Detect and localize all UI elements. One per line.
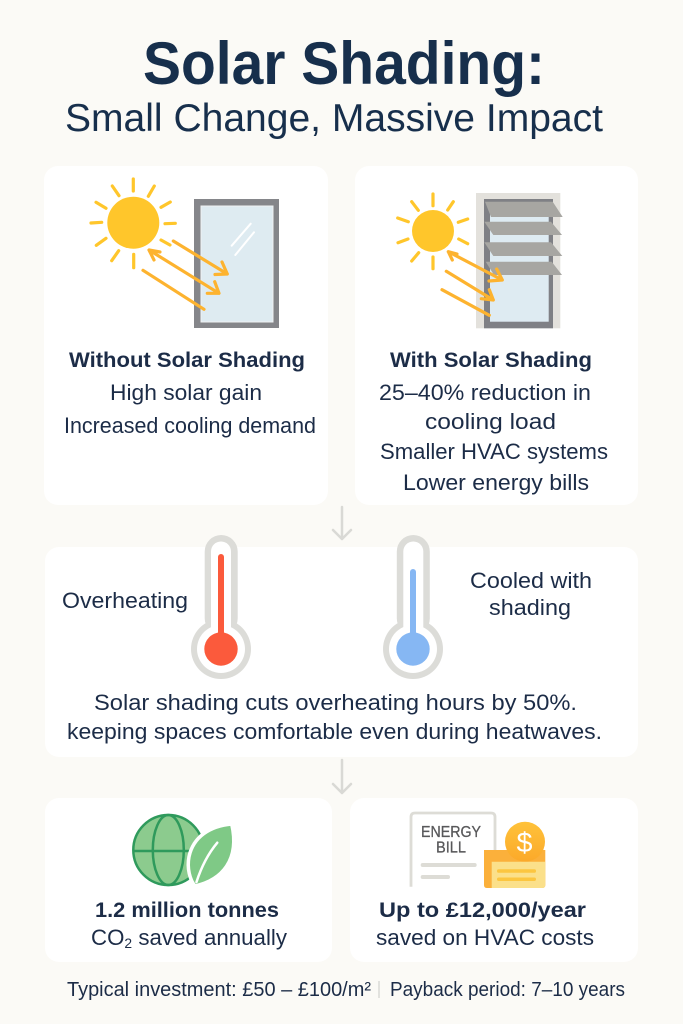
arrows: reduced sunlight (442, 252, 502, 315)
arrow: down to comfort panel (333, 507, 351, 539)
panel: hvac savings (350, 798, 638, 962)
icon: globe and leaf (133, 815, 234, 886)
arrows: sunlight entering window (143, 241, 227, 309)
text: smaller hvac: Smaller HVAC systems (380, 439, 608, 464)
icon: hot thermometer (191, 535, 251, 679)
text: cooling load: cooling load (425, 409, 556, 434)
footer: investment and payback: Payback period: 7–10 years (390, 979, 625, 1001)
text: overheating summary: Solar shading cuts overheating hours by 50%. (94, 690, 577, 715)
title: Solar Shading: (143, 30, 545, 97)
panel: without solar shading (44, 166, 328, 505)
arrow: down to results (333, 760, 351, 793)
icon: sun (398, 194, 468, 269)
label: cooled with shading: shading (489, 595, 571, 620)
icon: sun (91, 179, 175, 268)
text: overheating summary (67, 690, 602, 744)
text: overheating summary: keeping spaces comfortable even during heatwaves. (67, 719, 602, 744)
text: increased cooling demand: Increased cooling demand (64, 413, 316, 438)
icon: cool thermometer (383, 535, 443, 679)
text: co2 saved annually: 2 (124, 935, 132, 951)
stat: co2 tonnes: 1.2 million tonnes (95, 898, 279, 922)
subtitle: Small Change, Massive Impact (65, 97, 603, 140)
text: cooling load reduction: 25–40% reduction in (379, 380, 591, 405)
stat: hvac savings: Up to £12,000/year (379, 898, 587, 922)
panel: with solar shading (355, 166, 638, 505)
icon: energy bill and wallet: $ (516, 827, 533, 858)
text: high solar gain: High solar gain (110, 380, 262, 405)
panel: overheating (45, 535, 638, 757)
label: overheating: Overheating (62, 588, 188, 613)
icon: energy bill and wallet (411, 813, 545, 888)
text: saved on hvac costs: saved on HVAC costs (376, 925, 594, 950)
footer: investment and payback (67, 979, 625, 1001)
panel: co2 saved (45, 798, 332, 962)
heading: Without Solar Shading (69, 348, 305, 372)
icon: window (194, 199, 279, 328)
text: co2 saved annually: CO (91, 925, 125, 950)
icon: energy bill and wallet: BILL (436, 840, 466, 856)
label: cooled with shading (470, 568, 592, 620)
footer: investment and payback: Typical investment: £50 – £100/m² (67, 979, 371, 1001)
icon: energy bill and wallet: ENERGY (421, 824, 481, 841)
icon: shaded window (476, 193, 563, 328)
label: cooled with shading: Cooled with (470, 568, 592, 593)
heading: With Solar Shading (390, 348, 592, 372)
text: lower bills: Lower energy bills (403, 470, 589, 495)
text: co2 saved annually: saved annually (132, 925, 288, 950)
